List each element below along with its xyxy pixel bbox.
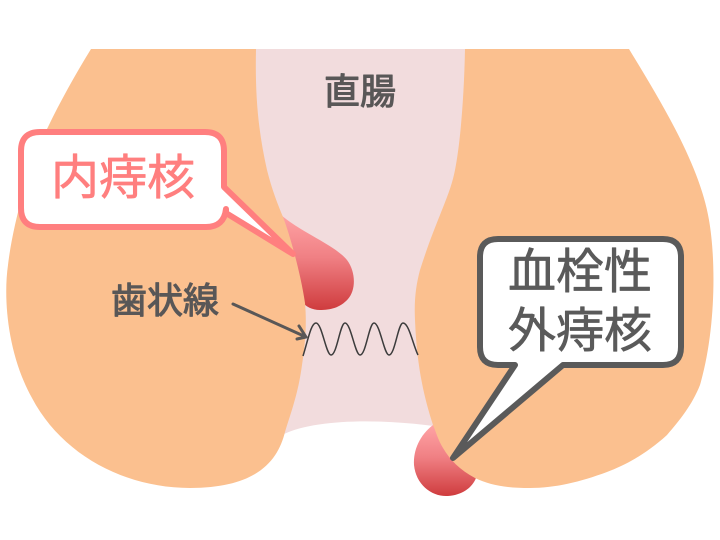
internal hemorrhoid xyxy=(280,214,354,310)
callout: internal hemorrhoid xyxy=(21,132,293,254)
callout: thrombosed external hemorrhoid: 血栓性 xyxy=(508,246,652,299)
callout: thrombosed external hemorrhoid: 外痔核 xyxy=(508,305,652,358)
left buttock xyxy=(6,49,306,488)
dentate wavy line xyxy=(303,323,418,356)
label: dentate line: 歯状線 xyxy=(111,280,219,321)
right buttock xyxy=(415,49,713,488)
label: rectum: 直腸 xyxy=(324,71,396,112)
callout: thrombosed external hemorrhoid xyxy=(453,239,681,458)
rectum lumen background xyxy=(250,49,470,440)
callout: internal hemorrhoid: 内痔核 xyxy=(51,152,195,205)
arrow: dentate line pointer xyxy=(233,304,306,339)
external hemorrhoid xyxy=(414,425,476,496)
